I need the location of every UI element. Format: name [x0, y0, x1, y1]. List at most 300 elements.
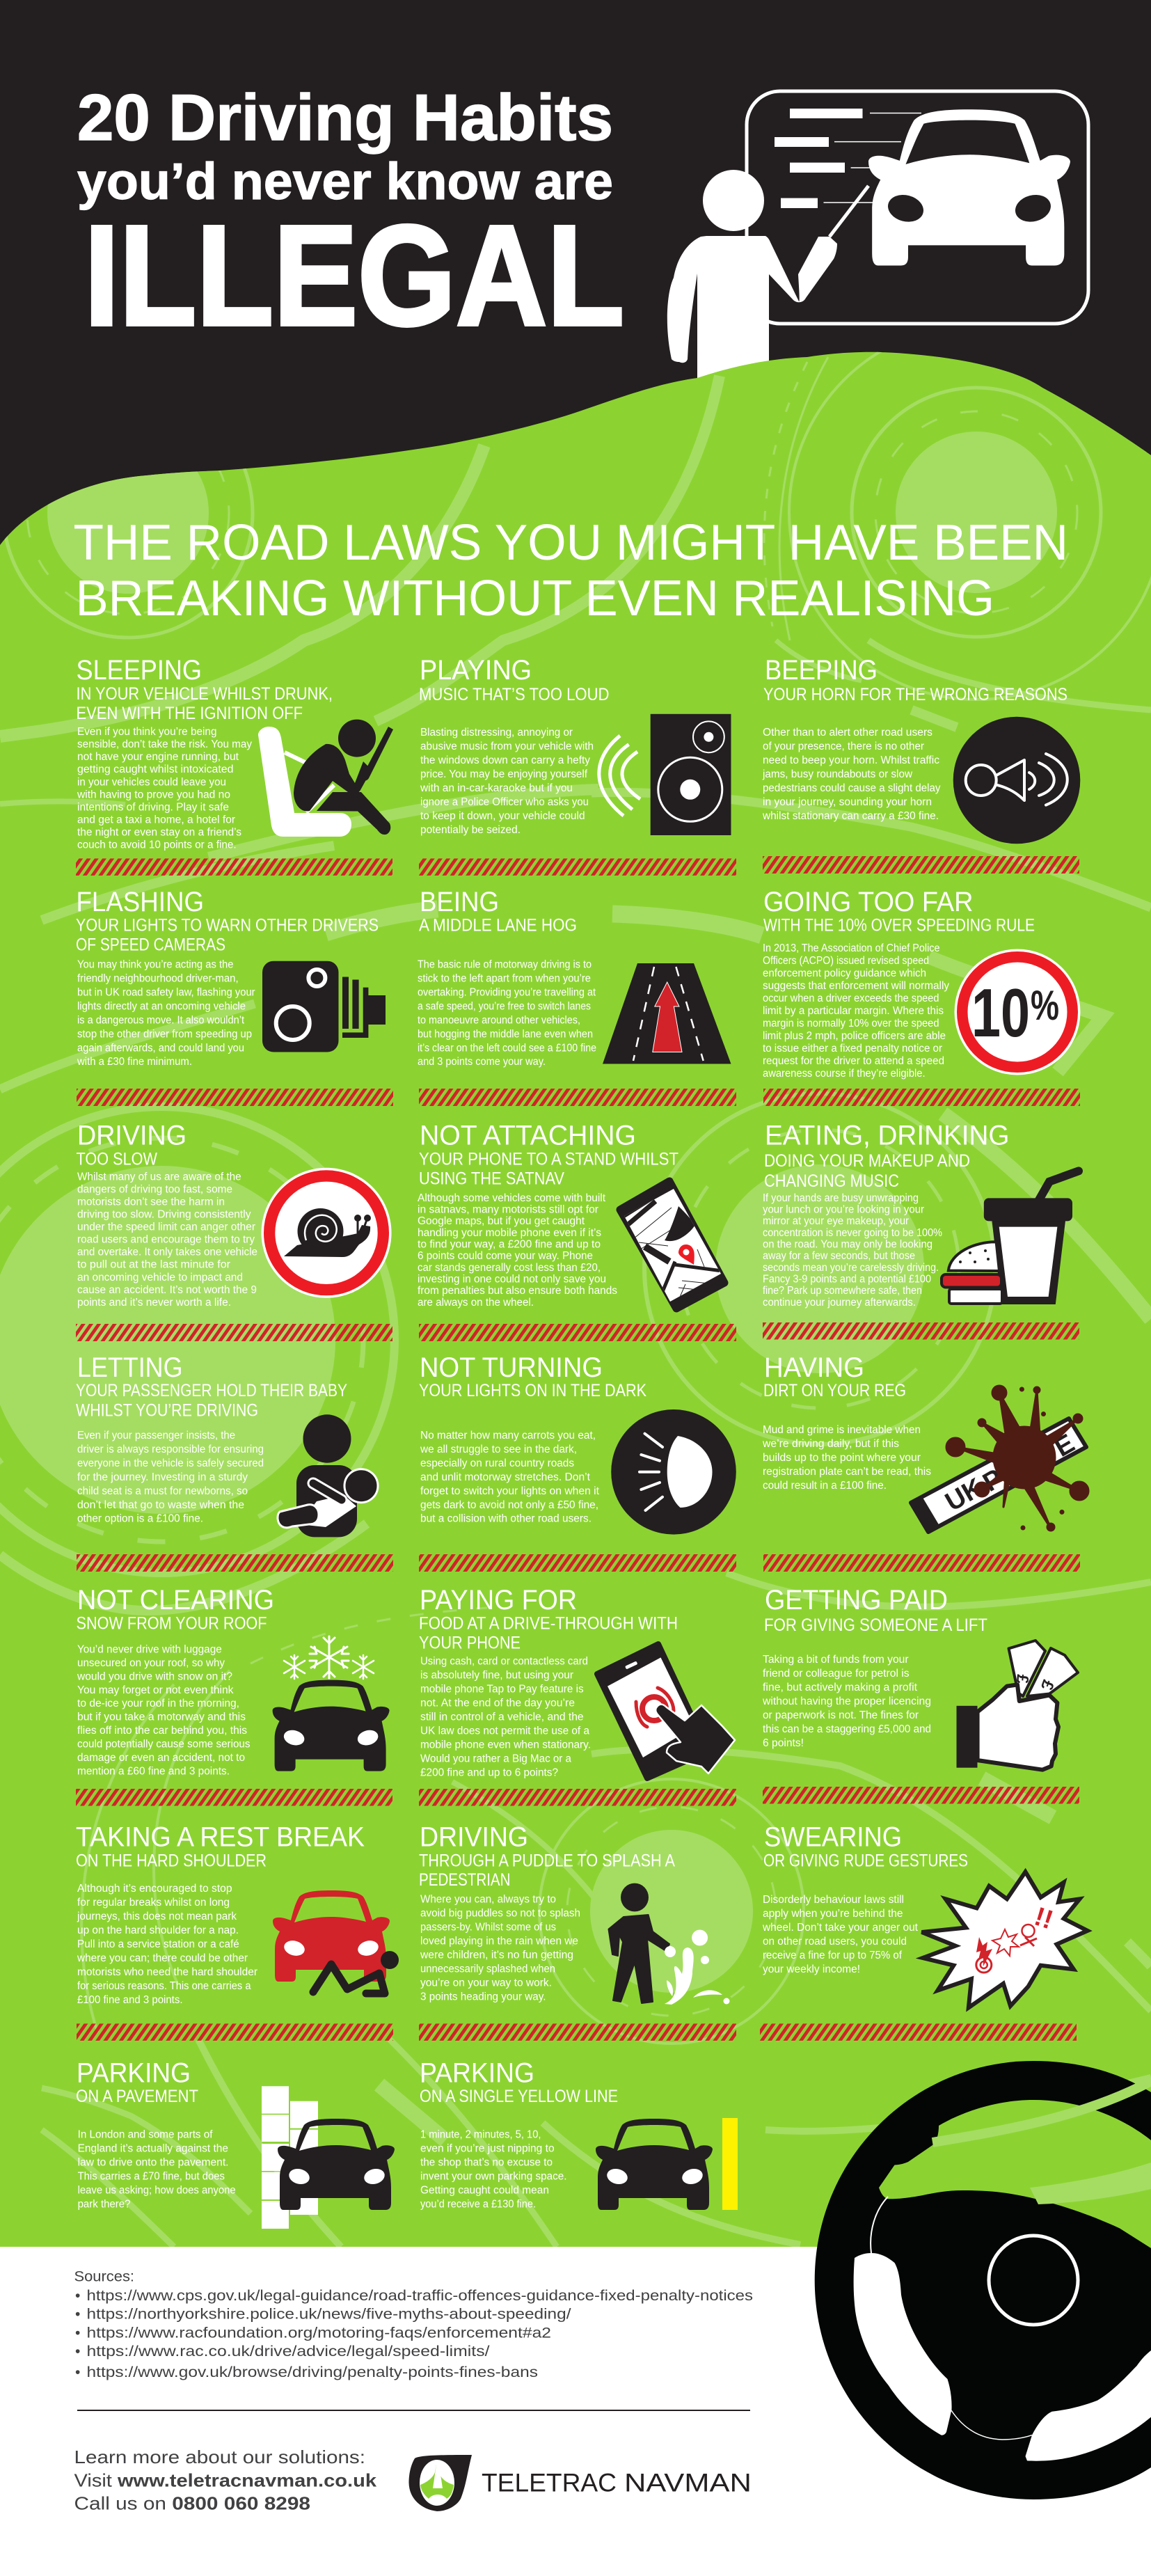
presenter figure with pointer [667, 170, 868, 390]
body text: not attaching: handling your mobile phone even if it’s [418, 1227, 601, 1239]
body text: eating: your lunch or you’re looking in your [763, 1204, 924, 1215]
icon: muddy number plate: E [1049, 1429, 1079, 1463]
sources: https://www.racfoundation.org/motoring-faqs/enforcement#a2 [86, 2325, 551, 2341]
body text: going too far: request for the driver to attend a speed [763, 1055, 944, 1067]
body text: not turning: gets dark to avoid not only a £50 fine, [420, 1499, 598, 1511]
body text: having: could result in a £100 fine. [763, 1480, 887, 1492]
body text: eating: away for a few seconds, but those [763, 1250, 915, 1262]
body text: eating [763, 1192, 942, 1309]
subheading: letting [76, 1381, 347, 1420]
stripe divider [419, 858, 736, 876]
body text: not turning: forget to switch your lights on when it [420, 1485, 600, 1497]
body text: taking a rest break: £100 fine and 3 points. [77, 1994, 182, 2006]
body text: beeping: of your presence, there is no other [763, 741, 924, 752]
sources: • [75, 2288, 80, 2304]
subheading: single yellow line: ON A SINGLE YELLOW LINE [420, 2087, 618, 2106]
title [77, 81, 624, 355]
body text: going too far: Officers (ACPO) issued revised speed [763, 955, 929, 967]
subheading: letting: WHILST YOU’RE DRIVING [76, 1400, 258, 1420]
stripe divider [76, 858, 392, 876]
stripe divider [763, 1787, 1079, 1804]
body text: going too far: limit plus 2 mph, police officers are able [763, 1030, 946, 1042]
body text: not attaching: Although some vehicles come with built [418, 1192, 606, 1204]
body text: paying for [420, 1655, 591, 1778]
body text: going too far: enforcement policy guidance which [763, 967, 926, 979]
body text: not attaching: from penalties but also ensure both hands [418, 1285, 617, 1297]
icon: 10% sign: % [1031, 982, 1059, 1029]
body text: sleeping: in your vehicles could leave you [77, 776, 226, 788]
body text: single yellow line: even if you’re just nipping to [420, 2143, 555, 2155]
panel: getting paid [762, 1585, 1079, 1804]
body text: flashing: friendly neighbourhood driver-man, [77, 973, 239, 984]
body text: single yellow line: invent your own parking space. [420, 2171, 566, 2183]
heading: driving: DRIVING [77, 1121, 186, 1151]
heading: not turning: NOT TURNING [420, 1352, 603, 1383]
heading: not clearing: NOT CLEARING [77, 1585, 274, 1615]
body text: taking a rest break [77, 1883, 257, 2006]
subheading: through a puddle: THROUGH A PUDDLE TO SPLASH A [419, 1851, 675, 1871]
body text: swearing: receive a fine for up to 75% of [763, 1950, 903, 1961]
body text: going too far [763, 942, 949, 1080]
body text: letting: Even if your passenger insists, the [77, 1430, 235, 1441]
body text: playing: the windows down can carry a hefty [420, 754, 590, 766]
heading: driving: DRIVING [420, 1822, 528, 1852]
body text: taking a rest break: for serious reasons. This one carries a [77, 1980, 251, 1992]
sources: https://northyorkshire.police.uk/news/five-myths-about-speeding/ [86, 2307, 571, 2323]
body text: taking a rest break: journeys, this does not mean park [77, 1911, 237, 1922]
body text: not clearing: mention a £60 fine and 3 points. [77, 1765, 230, 1777]
body text: sleeping: getting caught whilst intoxicated [77, 764, 234, 775]
body text: swearing: your weekly income! [763, 1963, 860, 1975]
body text: taking a rest break: motorists who need the hard shoulder [77, 1966, 257, 1978]
body text: getting paid: or paperwork is not. The fines for [763, 1709, 919, 1721]
body text: not turning: but a collision with other road users. [420, 1513, 592, 1525]
body text: getting paid: without having the proper licencing [762, 1696, 931, 1707]
sources: • [75, 2325, 80, 2341]
icon: car on pavement [262, 2086, 395, 2229]
stripe divider [763, 1089, 1080, 1106]
body text: being: and 3 points come your way. [418, 1056, 546, 1068]
heading: being: BEING [420, 887, 499, 917]
body text: flashing: with a £30 fine minimum. [77, 1056, 192, 1068]
body text: playing: with an in-car-karaoke but if you [420, 782, 573, 794]
body text: being: The basic rule of motorway driving is to [418, 959, 592, 970]
heading: taking a rest break: TAKING A REST BREAK [76, 1822, 365, 1852]
body text: through a puddle: avoid big puddles so not to splash [420, 1907, 580, 1920]
subheading: not attaching: YOUR PHONE TO A STAND WHILST [419, 1150, 678, 1169]
body text: being: a safe speed, you’re free to switch lanes [418, 1001, 591, 1012]
body text: single yellow line: Getting caught could mean [420, 2185, 549, 2197]
stripe divider [419, 1789, 736, 1805]
body text: getting paid: Taking a bit of funds from your [763, 1654, 909, 1666]
subheading: taking a rest break: ON THE HARD SHOULDER [76, 1851, 267, 1871]
sources: • [75, 2364, 80, 2380]
body text: letting: for the journey. Investing in a sturdy [77, 1471, 248, 1483]
subheading: sleeping: IN YOUR VEHICLE WHILST DRUNK, [77, 684, 333, 704]
body text: having: registration plate can’t be read, this [763, 1466, 931, 1478]
body text: letting: driver is always responsible for ensuring [77, 1444, 264, 1455]
icon: muddy number plate: UK [941, 1473, 989, 1517]
body text: paying for: UK law does not permit the use of a [420, 1725, 589, 1737]
panel: not clearing [76, 1585, 392, 1805]
body text: flashing: but in UK road safety law, flashing your [77, 987, 255, 998]
body text: swearing: apply when you’re behind the [763, 1908, 903, 1920]
body text: beeping: need to beep your horn. Whilst traffic [763, 754, 939, 766]
heading: paying for: PAYING FOR [420, 1585, 577, 1615]
body text: not attaching: Google maps, but if you get caught [418, 1215, 585, 1227]
panel: having dirt on your reg [762, 1352, 1088, 1572]
body text: too slow: Whilst many of us are aware of the [77, 1171, 241, 1183]
body text: paying for: mobile phone Tap to Pay feature is [420, 1683, 584, 1695]
stripe divider [763, 1322, 1079, 1339]
body text: too slow: under the speed limit can anger other [77, 1222, 255, 1233]
body text: single yellow line: 1 minute, 2 minutes, 5, 10, [420, 2129, 541, 2141]
body text: through a puddle: passers-by. Whilst some of us [420, 1921, 556, 1934]
subheading: paying for: YOUR PHONE [419, 1633, 521, 1652]
body text: beeping: whilst stationary can carry a £30 fine. [762, 810, 939, 822]
heading: having: HAVING [764, 1352, 864, 1383]
subheading: sleeping [77, 684, 333, 723]
subheading: flashing: YOUR LIGHTS TO WARN OTHER DRIVERS [76, 915, 379, 935]
body text: having [762, 1424, 931, 1492]
body text: not turning: No matter how many carrots you eat, [420, 1430, 596, 1441]
hero header [77, 81, 1088, 390]
logo: Teletrac Navman: NAVMAN [624, 2468, 752, 2497]
body text: eating: mirror at your eye makeup, your [763, 1215, 909, 1227]
stripe divider [419, 1324, 736, 1341]
body text: single yellow line [420, 2129, 566, 2211]
body text: playing: ignore a Police Officer who asks you [420, 796, 589, 808]
subheading: eating: CHANGING MUSIC [764, 1171, 899, 1191]
body text: taking a rest break: for regular breaks whilst on long [77, 1897, 230, 1909]
icon: loudspeaker [599, 714, 731, 835]
body text: beeping: Other than to alert other road users [763, 727, 932, 738]
body text: being [418, 959, 596, 1068]
body text: not clearing: You may forget or not even think [77, 1684, 234, 1696]
body text: through a puddle: loved playing in the rain when we [420, 1935, 578, 1947]
icon: horn [953, 717, 1080, 844]
icon: swearing burst: !! [1031, 1902, 1056, 1935]
panel: driving through a puddle [419, 1822, 736, 2041]
body text: not turning [420, 1430, 600, 1525]
icon: snail sign [262, 1168, 391, 1298]
body text: eating: fine? Park up somewhere safe, then [763, 1285, 922, 1297]
body text: flashing: lights directly at an oncoming vehicle [77, 1001, 246, 1012]
stripe divider [77, 1089, 393, 1106]
body text: too slow: cause an accident. It’s not worth the 9 [77, 1284, 257, 1296]
body text: flashing: again afterwards, and could land you [77, 1043, 244, 1054]
green road background [0, 325, 1151, 2248]
body text: not turning: especially on rural country roads [420, 1457, 574, 1469]
icon: motorway with red arrow [603, 963, 731, 1064]
heading: sleeping: SLEEPING [77, 655, 202, 686]
body text: too slow: and overtake. It only takes one vehicle [77, 1247, 257, 1258]
body text: on a pavement [78, 2129, 236, 2211]
body text: being: but hogging the middle lane even when [418, 1029, 593, 1040]
body text: taking a rest break: up on the hard shoulder for a nap. [77, 1925, 239, 1936]
body text: paying for: still in control of a vehicle, and the [420, 1711, 584, 1723]
body text: going too far: occur when a driver exceeds the speed [763, 993, 939, 1004]
body text: being: overtaking. Providing you’re travelling at [418, 987, 596, 998]
body text: sleeping [77, 726, 252, 851]
icon: passenger holding baby [278, 1414, 378, 1537]
subheading: not attaching [419, 1150, 678, 1189]
body text: swearing: wheel. Don’t take your anger out [762, 1922, 919, 1934]
subheading: paying for: FOOD AT A DRIVE-THROUGH WITH [419, 1614, 678, 1634]
panel: taking a rest break [76, 1822, 399, 2041]
body text: not attaching [418, 1192, 617, 1309]
subheading: through a puddle: PEDESTRIAN [419, 1870, 511, 1890]
body text: paying for: not. At the end of the day you’re [420, 1697, 575, 1709]
body text: letting [77, 1430, 264, 1525]
icon: speed camera [262, 961, 386, 1052]
body text: being: stick to the left apart from when you’re [418, 973, 591, 984]
body text: not attaching: car stands generally cost less than £20, [418, 1262, 601, 1274]
heading: eating, drinking: EATING, DRINKING [765, 1121, 1009, 1151]
subheading: beeping: YOUR HORN FOR THE WRONG REASONS [763, 685, 1067, 704]
heading: not attaching: NOT ATTACHING [420, 1121, 636, 1151]
subheading: flashing: OF SPEED CAMERAS [76, 935, 225, 955]
panel: beeping [762, 655, 1080, 874]
subtitle [74, 514, 1068, 626]
icon: snow on car [273, 1636, 390, 1771]
body text: too slow: points and it’s never worth a life. [77, 1297, 231, 1309]
body text: not clearing: would you drive with snow on it? [77, 1670, 232, 1682]
stripe divider [77, 2023, 393, 2041]
subheading: too slow: TOO SLOW [77, 1150, 157, 1169]
contact details: Call us on 0800 060 8298 [74, 2493, 310, 2514]
body text: not clearing: but if you take a motorway and this [77, 1712, 246, 1723]
subheading: swearing: OR GIVING RUDE GESTURES [763, 1851, 968, 1871]
body text: sleeping: sensible, don’t take the risk. You may [77, 738, 252, 750]
body text: not clearing [77, 1644, 251, 1777]
body text: going too far: limit by a particular margin. Where this [763, 1005, 944, 1017]
body text: too slow: to pull out at the last minute for [77, 1259, 230, 1271]
sources: • [75, 2344, 80, 2360]
body text: flashing: stop the other driver from speeding up [77, 1029, 252, 1040]
body text: single yellow line: the shop that’s no excuse to [420, 2157, 553, 2169]
body text: letting: child seat is a must for newborns, so [77, 1485, 248, 1497]
body text: not attaching: investing in one could not only save you [418, 1274, 606, 1285]
body text: through a puddle: were children, it’s no fun getting [420, 1949, 573, 1961]
icon: headlight [611, 1409, 736, 1535]
panel: going too far [763, 887, 1080, 1106]
heading: swearing: SWEARING [764, 1822, 902, 1852]
body text: too slow: motorists don’t see the harm in [77, 1196, 225, 1208]
body text: not clearing: to de-ice your roof in the morning, [77, 1698, 239, 1709]
body text: sleeping: intentions of driving. Play it safe [77, 802, 229, 813]
subheading: going too far: WITH THE 10% OVER SPEEDING RULE [763, 915, 1035, 935]
body text: paying for: Using cash, card or contactless card [420, 1655, 588, 1667]
subheading: sleeping: EVEN WITH THE IGNITION OFF [77, 704, 303, 723]
subheading: not clearing: SNOW FROM YOUR ROOF [77, 1614, 267, 1634]
body text: playing: to keep it down, your vehicle could [420, 810, 585, 822]
contact details [74, 2447, 377, 2514]
body text: going too far: to issue either a fixed penalty notice or [763, 1043, 942, 1054]
icon: sleeping driver in seat [258, 720, 393, 837]
body text: having: builds up to the point where your [763, 1452, 921, 1464]
heading: getting paid: GETTING PAID [765, 1585, 948, 1615]
body text: not attaching: are always on the wheel. [418, 1297, 534, 1309]
body text: eating: on the road. You may only be looking [763, 1239, 932, 1250]
stripe divider [77, 1554, 393, 1572]
stripe divider [763, 1554, 1080, 1572]
panel: parking on a pavement [76, 2058, 395, 2229]
body text: not clearing: flies off into the car behind you, this [77, 1725, 247, 1737]
subheading: paying for [419, 1614, 678, 1652]
body text: getting paid: 6 points! [763, 1737, 804, 1749]
subheading: through a puddle [419, 1851, 675, 1890]
body text: eating: seconds mean you’re carelessly driving. [763, 1262, 939, 1274]
body text: eating: concentration is never going to be 100% [763, 1227, 942, 1239]
body text: taking a rest break: Pull into a service station or a café [77, 1938, 239, 1950]
body text: on a pavement: leave us asking; how does anyone [78, 2185, 236, 2197]
body text: being: to manoeuvre around other vehicles, [418, 1015, 580, 1026]
contact details: Visit www.teletracnavman.co.uk [74, 2470, 377, 2491]
body text: playing: Blasting distressing, annoying or [420, 727, 573, 738]
body text: taking a rest break: Although it’s encouraged to stop [77, 1883, 232, 1895]
body text: too slow: road users and encourage them to try [77, 1234, 255, 1246]
logo: Teletrac Navman [409, 2455, 752, 2511]
body text: sleeping: not have your engine running, but [77, 751, 239, 763]
title: you’d never know are [77, 152, 613, 210]
body text: sleeping: Even if you think you’re being [77, 726, 217, 738]
body text: not attaching: in satnavs, many motorists still opt for [418, 1204, 598, 1215]
sources: https://www.rac.co.uk/drive/advice/legal/speed-limits/ [86, 2344, 490, 2360]
icon: car and yellow line [596, 2118, 738, 2210]
subheading: not attaching: USING THE SATNAV [419, 1169, 564, 1189]
subheading: flashing [76, 915, 379, 955]
panel: driving too slow [76, 1121, 392, 1341]
body text: taking a rest break: where you can; there could be other [77, 1952, 248, 1964]
body text: eating: If your hands are busy unwrapping [763, 1192, 919, 1204]
body text: getting paid: fine, but actively making a profit [763, 1682, 918, 1693]
body text: going too far: suggests that enforcement will normally [763, 980, 949, 992]
stripe divider [76, 1789, 392, 1805]
body text: too slow: an oncoming vehicle to impact and [77, 1272, 243, 1283]
panel: parking on a single yellow line [420, 2058, 738, 2211]
body text: through a puddle: you’re on your way to work. [420, 1977, 552, 1989]
body text: sleeping: couch to avoid 10 points or a fine. [77, 839, 237, 851]
icon: burger and drink [942, 1171, 1079, 1304]
body text: on a pavement: England it’s actually against the [78, 2143, 228, 2155]
stripe divider [76, 1324, 392, 1341]
subheading: getting paid: FOR GIVING SOMEONE A LIFT [764, 1615, 987, 1635]
subheading: playing: MUSIC THAT’S TOO LOUD [419, 685, 610, 704]
sources [74, 2269, 753, 2380]
logo: Teletrac Navman: TELETRAC [482, 2468, 617, 2497]
body text: playing [420, 727, 594, 836]
panel: sleeping [76, 655, 393, 876]
panel: not attaching [418, 1121, 736, 1341]
subtitle: BREAKING WITHOUT EVEN REALISING [76, 570, 994, 626]
body text: on a pavement: This carries a £70 fine, but does [78, 2171, 225, 2183]
sources: https://www.gov.uk/browse/driving/penalty-points-fines-bans [86, 2364, 538, 2380]
body text: playing: abusive music from your vehicle with [420, 741, 594, 752]
icon: 10% sign: 10 [971, 974, 1030, 1051]
body text: getting paid: this can be a staggering £5,000 and [763, 1723, 931, 1735]
panel: eating, drinking [763, 1121, 1079, 1339]
body text: playing: price. You may be enjoying yourself [420, 768, 588, 780]
panel: playing [419, 655, 736, 876]
heading: letting: LETTING [77, 1352, 182, 1383]
panel: not turning [419, 1352, 736, 1572]
body text: sleeping: with having to prove you had no [77, 789, 230, 800]
contact details: Learn more about our solutions: [74, 2447, 365, 2467]
subheading: being: A MIDDLE LANE HOG [419, 915, 577, 935]
panel: being a middle lane hog [418, 887, 736, 1106]
sources: https://www.cps.gov.uk/legal-guidance/road-traffic-offences-guidance-fixed-penalty-notices [86, 2288, 753, 2304]
title: ILLEGAL [84, 196, 624, 355]
body text: paying for: Would you rather a Big Mac or a [420, 1753, 571, 1764]
icon: muddy number plate [911, 1386, 1088, 1532]
body text: on a pavement: park there? [78, 2199, 131, 2211]
stripe divider [763, 856, 1079, 874]
body text: going too far: In 2013, The Association of Chief Police [763, 942, 939, 954]
body text: too slow [77, 1171, 257, 1309]
heading: playing: PLAYING [420, 655, 532, 686]
body text: getting paid [762, 1654, 931, 1749]
icon: 10% sign [955, 949, 1080, 1075]
panel: letting [76, 1352, 393, 1572]
body text: paying for: £200 fine and up to 6 points? [420, 1767, 558, 1778]
icon: pedestrian and splash [608, 1883, 729, 2005]
body text: not clearing: You’d never drive with luggage [77, 1644, 222, 1655]
body text: not clearing: damage or even an accident, not to [77, 1752, 245, 1764]
body text: sleeping: the night or even stay on a friend’s [77, 827, 241, 839]
heading: going too far: GOING TOO FAR [763, 887, 973, 917]
body text: not turning: and unlit motorway stretches. Don’t [420, 1471, 591, 1483]
sources: Sources: [74, 2269, 134, 2285]
body text: not clearing: unsecured on your roof, so why [77, 1657, 225, 1669]
body text: flashing [77, 959, 255, 1068]
body text: beeping: in your journey, sounding your horn [763, 796, 932, 808]
body text: through a puddle: 3 points heading your way. [420, 1991, 546, 2003]
heading: parking: PARKING [420, 2058, 534, 2089]
icon: phone tap to pay [597, 1644, 735, 1778]
body text: swearing: Disorderly behaviour laws still [763, 1894, 904, 1906]
body text: having: Mud and grime is inevitable when [763, 1424, 921, 1436]
sources: • [75, 2307, 80, 2323]
body text: being: it’s clear on the left could see a £100 fine [418, 1043, 596, 1054]
panel: paying for food [419, 1585, 736, 1805]
icon: muddy number plate: P [978, 1464, 1008, 1498]
body text: not attaching: to find your way, a £200 fine and up to [418, 1239, 601, 1250]
body text: letting: don’t let that go to waste when the [77, 1499, 244, 1511]
icon: swearing burst [921, 1872, 1088, 2007]
subheading: having: DIRT ON YOUR REG [763, 1381, 906, 1400]
body text: beeping: pedestrians could cause a slight delay [763, 782, 941, 794]
subheading: eating [764, 1151, 970, 1191]
body text: too slow: driving too slow. Driving consistently [77, 1208, 251, 1221]
body text: not clearing: could potentially cause some serious [77, 1739, 251, 1750]
body text: beeping [762, 727, 941, 822]
body text: beeping: jams, busy roundabouts or slow [762, 768, 913, 780]
body text: not turning: we all struggle to see in the dark, [420, 1444, 577, 1455]
icon: phone with map [620, 1181, 724, 1309]
body text: eating: continue your journey afterwards. [763, 1297, 916, 1309]
stripe divider [419, 1089, 736, 1106]
body text: on a pavement: law to drive onto the pavement. [78, 2157, 228, 2169]
panel: swearing [760, 1822, 1088, 2041]
body text: through a puddle [420, 1893, 580, 2003]
panel: flashing [76, 887, 393, 1106]
body text: going too far: margin is normally 10% over the speed [763, 1018, 939, 1029]
body text: through a puddle: unnecessarily splashed when [420, 1963, 555, 1975]
heading: beeping: BEEPING [765, 655, 878, 686]
body text: going too far: awareness course if they’re eligible. [763, 1068, 926, 1080]
subheading: eating: DOING YOUR MAKEUP AND [764, 1151, 970, 1171]
